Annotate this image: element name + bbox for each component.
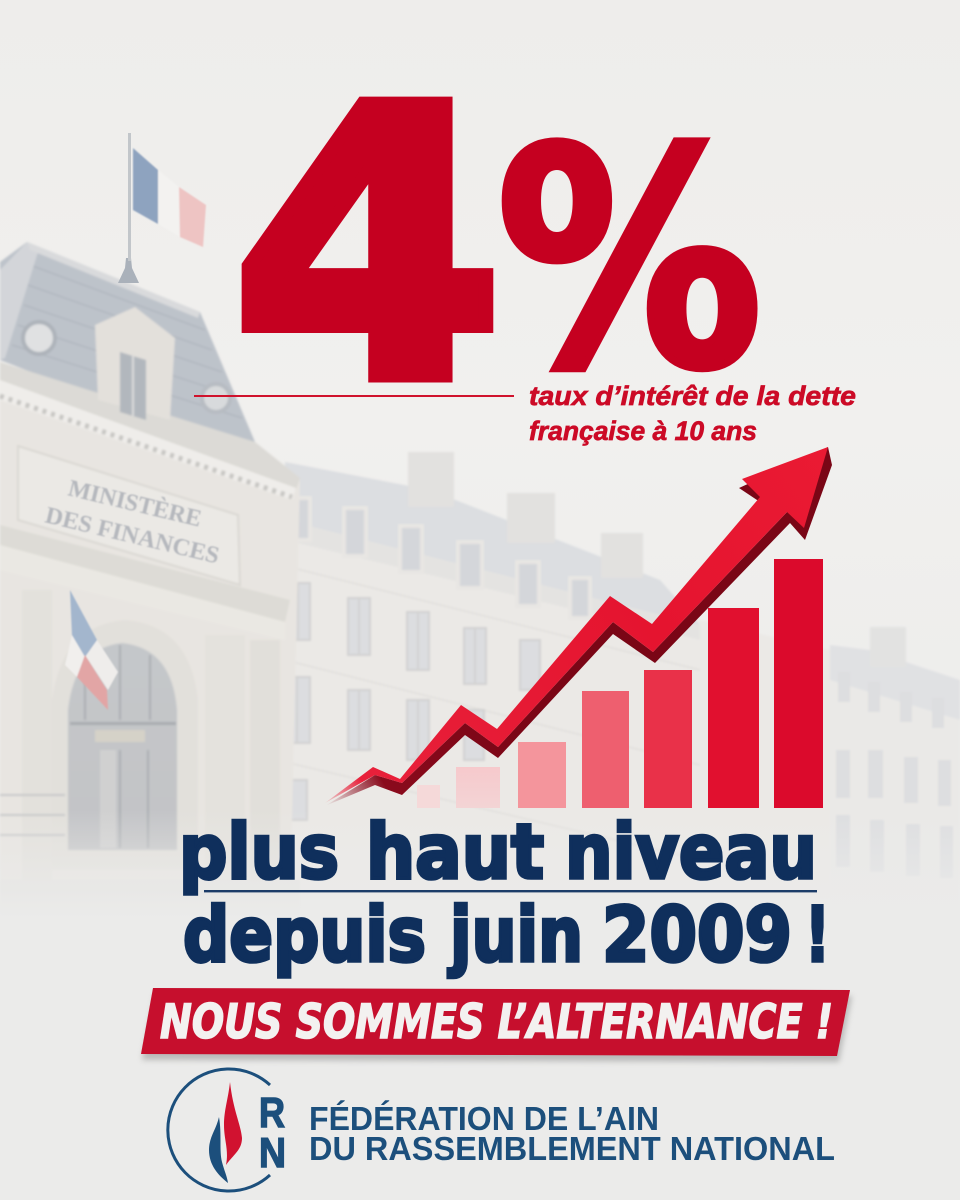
heading: plus haut niveau: niveau (565, 807, 817, 896)
organisation name: DU RASSEMBLEMENT NATIONAL (309, 1130, 835, 1167)
heading: depuis juin 2009: 2009 (602, 890, 792, 979)
heading: depuis juin 2009: ! (805, 890, 830, 979)
ring (168, 1069, 270, 1191)
inscription: MINISTÈRE (66, 476, 204, 533)
heading: depuis juin 2009 (183, 890, 830, 979)
blue flame (209, 1117, 228, 1183)
flag pole (128, 133, 131, 261)
main wing (280, 480, 830, 900)
logo: RN flame (168, 1069, 286, 1191)
letters: R (259, 1089, 285, 1136)
subtitle rule (194, 395, 514, 397)
finial (118, 258, 139, 283)
subtitle: française à 10 ans (529, 416, 757, 446)
heading: plus haut niveau: haut (366, 807, 544, 896)
dormers (288, 498, 590, 618)
windows (285, 583, 540, 820)
top flag (133, 148, 206, 247)
dormer big (95, 307, 175, 420)
arrow (325, 447, 832, 806)
figure 4: 4 (231, 30, 504, 464)
headline figure: 4% (231, 30, 762, 464)
percent sign: % (497, 85, 762, 435)
inscription plaque (18, 446, 240, 585)
arrow face (325, 447, 828, 803)
far wing (830, 655, 960, 905)
heading: plus haut niveau (179, 807, 817, 896)
inscription: DES FINANCES (43, 503, 222, 569)
organisation name: FÉDÉRATION DE L’AIN (309, 1100, 659, 1137)
haze (0, 810, 960, 920)
banner (141, 988, 852, 1062)
heading: depuis juin 2009: depuis (183, 890, 426, 979)
red flame (224, 1082, 242, 1165)
inscription (43, 476, 222, 569)
lower flag (65, 590, 118, 710)
subtitle (529, 381, 856, 446)
stairs (0, 880, 300, 920)
roof (0, 242, 255, 442)
subtitle: taux d’intérêt de la dette (529, 381, 856, 411)
eave (0, 362, 300, 490)
heading: plus haut niveau: plus (179, 807, 339, 896)
arched door (52, 620, 198, 870)
bar chart (417, 559, 823, 808)
pillars (22, 590, 52, 880)
heading: depuis juin 2009: juin (448, 890, 583, 979)
organisation name (309, 1100, 835, 1167)
logo: RN flame: N (259, 1129, 286, 1176)
heading rule (204, 890, 817, 892)
oeil de boeuf (23, 322, 55, 354)
arrow side (325, 447, 832, 806)
left pavilion facade (0, 365, 300, 905)
